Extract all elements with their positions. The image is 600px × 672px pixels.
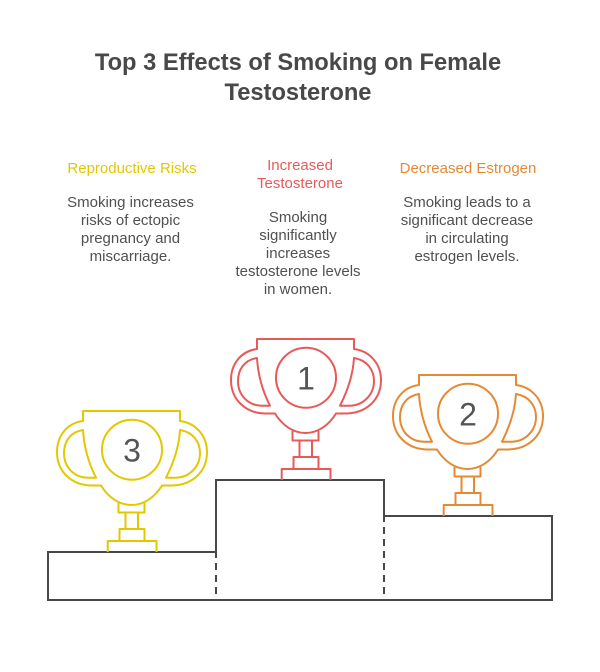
- trophy 3: [57, 411, 207, 552]
- text: Reproductive Risks description: pregnancy and: [81, 230, 180, 247]
- text: Decreased Estrogen description: estrogen levels.: [414, 248, 520, 265]
- text: Decreased Estrogen description: significant decrease: [401, 212, 533, 229]
- heading: Increased Testosterone: Increased: [267, 157, 333, 174]
- trophy 3: 3: [123, 432, 141, 468]
- trophy 1: [231, 339, 381, 480]
- heading: Increased Testosterone: [257, 157, 343, 192]
- heading: Reproductive Risks: Reproductive Risks: [67, 160, 197, 177]
- text: Increased Testosterone description: significantly: [259, 227, 337, 244]
- text: Increased Testosterone description: Smoking: [269, 209, 327, 226]
- podium: [48, 480, 552, 600]
- text: Decreased Estrogen description: Smoking leads to a: [403, 194, 531, 211]
- text: Decreased Estrogen description: [401, 194, 533, 265]
- text: Reproductive Risks description: [67, 194, 194, 265]
- text: Increased Testosterone description: testosterone levels: [235, 263, 361, 280]
- title: Testosterone: [224, 80, 371, 106]
- heading: Increased Testosterone: Testosterone: [257, 175, 343, 192]
- heading: Decreased Estrogen: Decreased Estrogen: [400, 160, 536, 177]
- trophy 1: 1: [297, 360, 315, 396]
- text: Reproductive Risks description: Smoking increases: [67, 194, 194, 211]
- text: Decreased Estrogen description: in circulating: [425, 230, 509, 247]
- text: Reproductive Risks description: risks of ectopic: [81, 212, 180, 229]
- text: Increased Testosterone description: in women.: [264, 281, 332, 298]
- text: Increased Testosterone description: increases: [266, 245, 330, 262]
- title: Top 3 Effects of Smoking on Female: [95, 50, 501, 76]
- title: [95, 50, 501, 106]
- trophy 2: 2: [459, 396, 477, 432]
- trophy 2: [393, 375, 543, 516]
- text: Increased Testosterone description: [235, 209, 361, 298]
- text: Reproductive Risks description: miscarriage.: [90, 248, 171, 265]
